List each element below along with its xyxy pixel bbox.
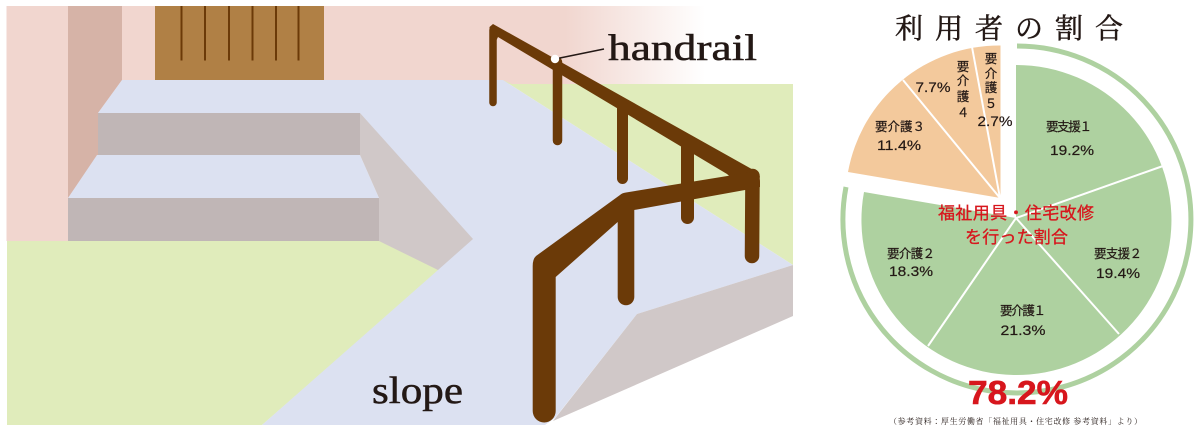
step side wall: [360, 113, 473, 270]
chart title: 利用者の割合: [895, 13, 1123, 45]
far posts: [493, 30, 752, 256]
label: 要介護5: 介: [985, 67, 998, 81]
wall: [6, 6, 705, 241]
label: slope: slope: [372, 370, 463, 412]
label: 要介護3: 11.4%: [877, 138, 921, 153]
far rail: [490, 24, 760, 190]
panel: entrance illustration: [6, 6, 793, 425]
label: 要支援1: 要支援１: [1046, 120, 1092, 134]
outer ring for 78.2 percent: [843, 46, 1191, 393]
front rail: [533, 172, 760, 423]
label: 要介護1: 要介護１: [1000, 303, 1046, 318]
handrail leader line and dot: [551, 49, 604, 63]
source note: （参考資料：厚生労働省「福祉用具・住宅改修 参考資料」より）: [889, 416, 1142, 426]
label: 要支援1: 19.2%: [1050, 143, 1094, 158]
label: 要介護2: [887, 246, 935, 279]
label: 要支援1: [1046, 120, 1094, 158]
center caption: 福祉用具・住宅改修: [938, 204, 1094, 223]
label: 要支援2: [1094, 247, 1142, 281]
lower step: [68, 155, 379, 241]
label: 要介護3: 要介護３: [875, 119, 925, 134]
label: 要介護5: 2.7%: [978, 114, 1012, 129]
label: 要介護1: [1000, 303, 1046, 338]
label: 要介護4: 介: [957, 74, 970, 88]
label: 要支援2: 要支援２: [1094, 247, 1142, 261]
label: 要介護4: 7.7%: [916, 80, 950, 95]
handrail structure: [490, 24, 760, 423]
slope side wall: [553, 265, 793, 421]
label: 要介護5: 護: [985, 80, 998, 95]
label: handrail: handrail: [608, 28, 757, 69]
pillar: [68, 6, 122, 198]
label: 要介護2: 要介護２: [887, 246, 935, 261]
total percentage: 78.2%: [968, 374, 1068, 411]
label: 要介護5: [978, 52, 1012, 129]
lawn: right: [503, 80, 793, 265]
upper step: [98, 113, 360, 155]
label: 要介護4: 要: [957, 60, 969, 74]
door: [155, 6, 324, 80]
green pie sectors: [861, 65, 1171, 375]
label: 要介護5: ５: [985, 97, 997, 111]
label: 要介護4: 護: [957, 89, 970, 104]
panel: pie chart of users: [843, 13, 1191, 426]
label: 要介護5: 要: [985, 52, 997, 66]
orange pie sectors: [848, 45, 1000, 198]
label: 要支援2: 19.4%: [1096, 266, 1140, 281]
label: 要介護1: 21.3%: [1000, 323, 1046, 338]
front middle post: [618, 205, 634, 305]
center caption: を行った割合: [965, 228, 1068, 247]
label: 要介護3: [875, 119, 925, 153]
lawn: left: [7, 241, 440, 425]
slope surface: [98, 80, 793, 425]
center caption: [938, 204, 1094, 247]
label: 要介護4: [916, 60, 970, 120]
label: 要介護4: ４: [957, 106, 969, 120]
label: 要介護2: 18.3%: [889, 264, 933, 279]
